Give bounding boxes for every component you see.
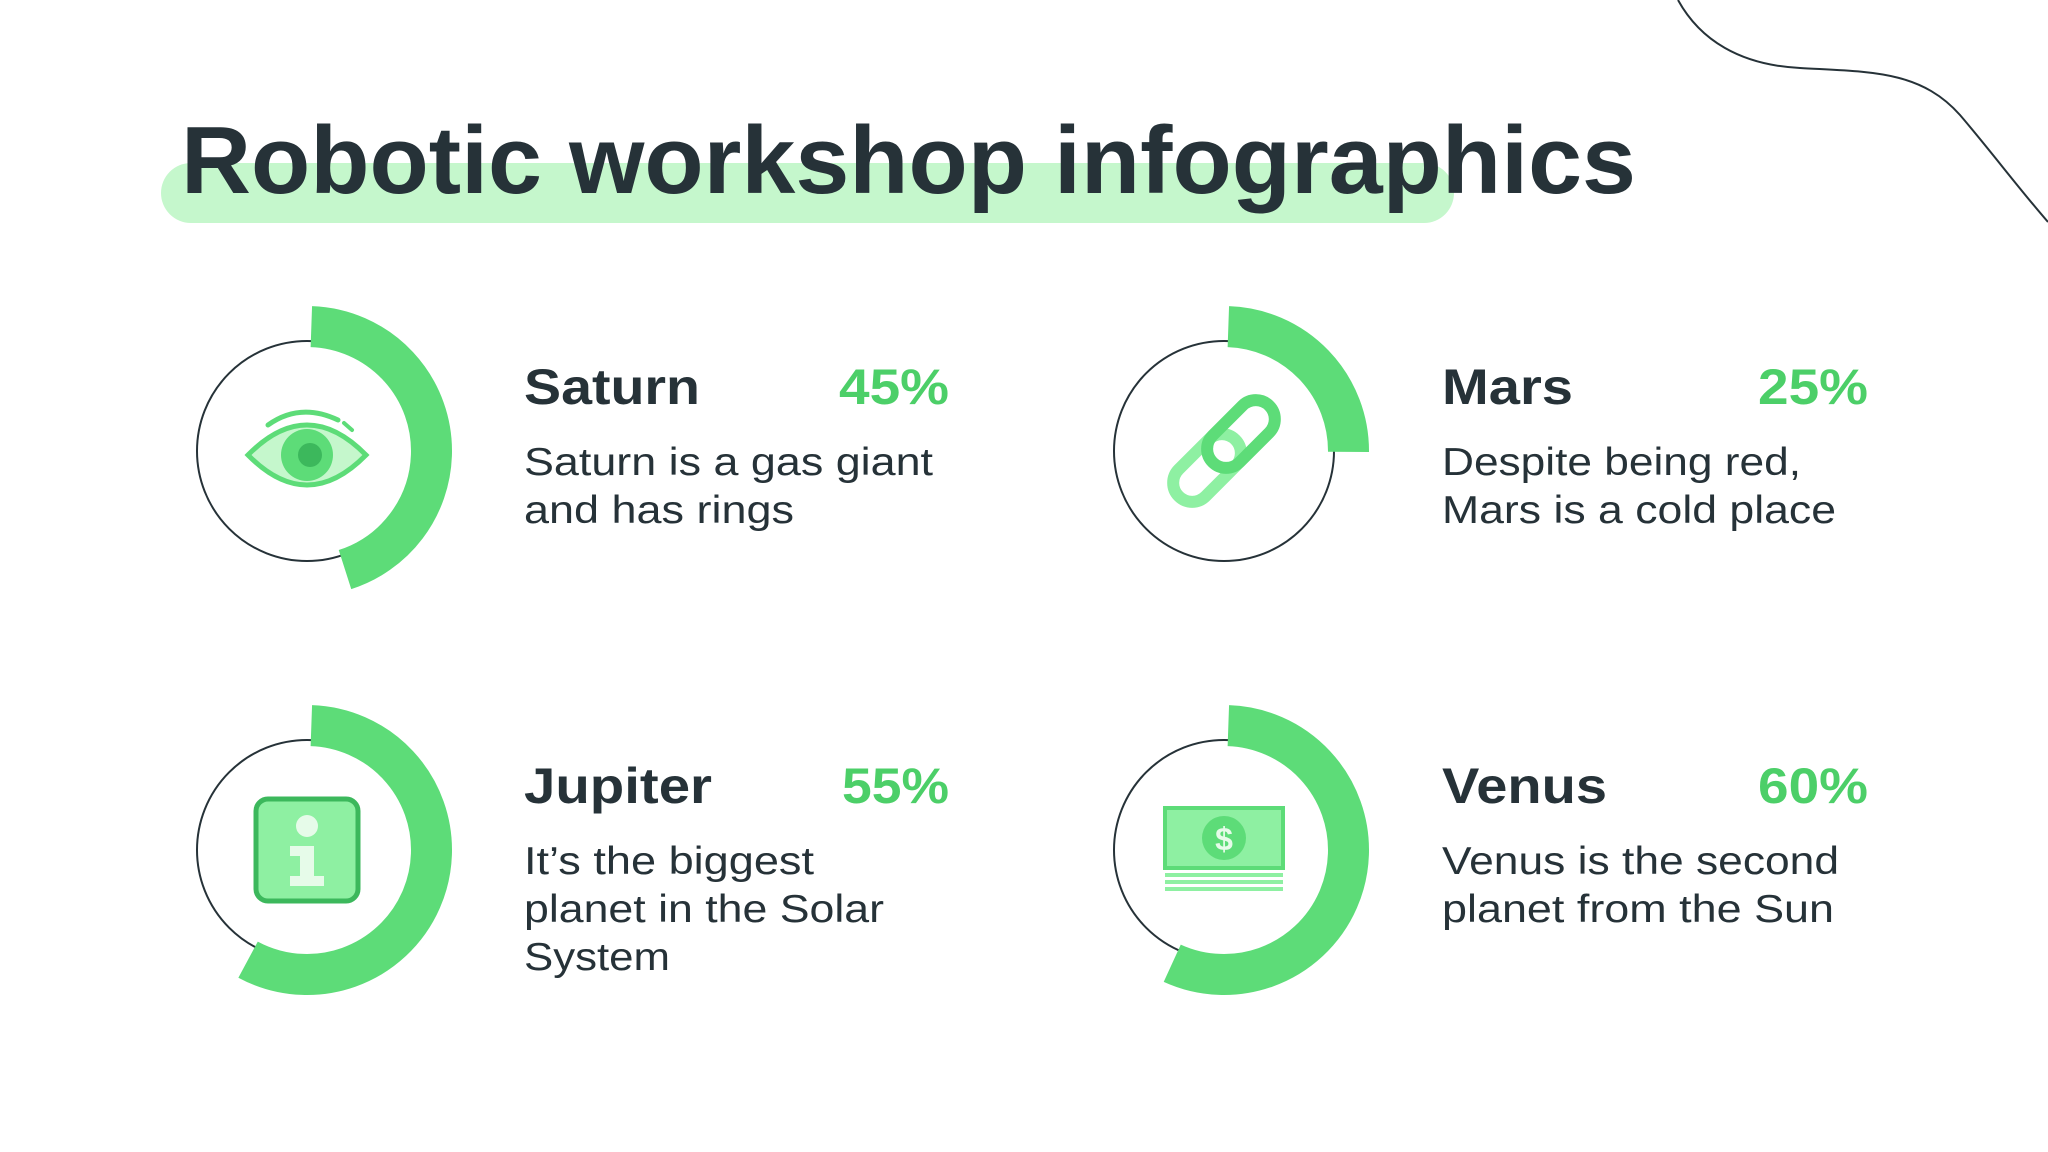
description: and has rings xyxy=(524,489,794,532)
icon: chain link xyxy=(1165,392,1283,510)
heading: Saturn: Saturn xyxy=(524,359,700,415)
description: It’s the biggest xyxy=(524,840,814,883)
description: Saturn is a gas giant xyxy=(524,441,933,484)
percent: 55%: 55% xyxy=(842,758,949,814)
icon: money xyxy=(1165,808,1283,889)
panel: Mars xyxy=(1095,322,1868,580)
donut: Venus 60% xyxy=(1095,721,1353,979)
description: Venus is the second xyxy=(1442,840,1839,883)
panel: Saturn xyxy=(178,322,949,580)
percent: 60%: 60% xyxy=(1758,758,1868,814)
percent: 45%: 45% xyxy=(839,359,949,415)
decorative curve xyxy=(1678,0,2048,222)
panel: Venus xyxy=(1095,721,1868,979)
donut: Jupiter 55% xyxy=(178,721,436,979)
heading: Mars: Mars xyxy=(1442,359,1573,415)
description: Mars is a cold place xyxy=(1442,489,1836,532)
description: planet in the Solar xyxy=(524,888,884,931)
description: Despite being red, xyxy=(1442,441,1801,484)
description: planet from the Sun xyxy=(1442,888,1834,931)
heading: Venus: Venus xyxy=(1442,758,1607,814)
icon: eye xyxy=(248,412,366,485)
title: Robotic workshop infographics xyxy=(181,107,1636,214)
donut: Saturn 45% xyxy=(178,322,436,580)
icon: info xyxy=(256,799,358,901)
panel: Jupiter xyxy=(178,721,949,979)
description: System xyxy=(524,936,670,979)
percent: 25%: 25% xyxy=(1758,359,1868,415)
donut: Mars 25% xyxy=(1095,322,1353,580)
icon: money: $ xyxy=(1215,821,1233,857)
heading: Jupiter: Jupiter xyxy=(524,758,712,814)
